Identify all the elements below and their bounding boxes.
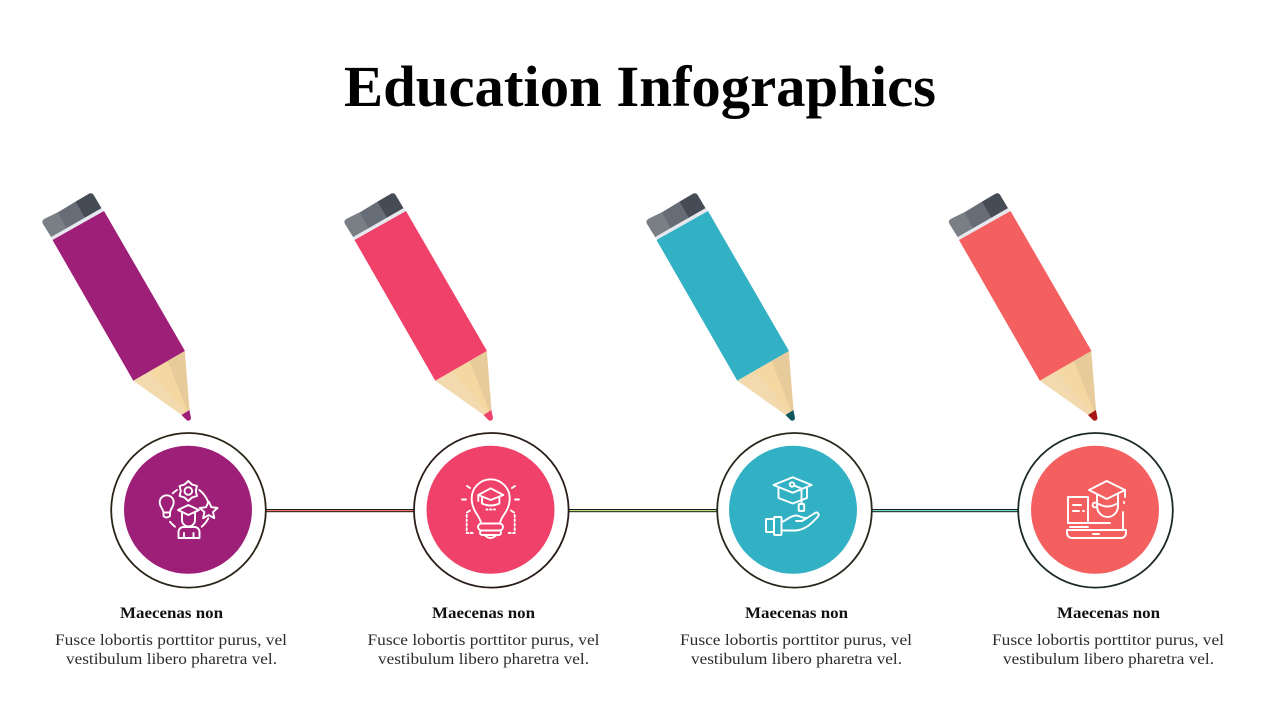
badge circle: [124, 446, 252, 574]
panel: step 1: [42, 193, 288, 668]
panel: step 3: [646, 193, 913, 668]
label: step 4 text: vestibulum libero pharetra vel.: [1003, 651, 1214, 668]
panel: step 4: [949, 193, 1225, 668]
label: step 3 text: [680, 605, 913, 668]
label: step 4 text: [992, 605, 1225, 668]
label: step 1 text: [55, 605, 288, 668]
panel: step 2: [344, 193, 600, 668]
label: step 4 text: Fusce lobortis porttitor purus, vel: [992, 632, 1225, 649]
pencil: coral: [949, 193, 1098, 421]
label: step 3 text: Fusce lobortis porttitor purus, vel: [680, 632, 913, 649]
label: step 2 text: vestibulum libero pharetra vel.: [378, 651, 589, 668]
pencil: purple: [42, 193, 191, 421]
label: step 2 text: [368, 605, 600, 668]
badge circle: [426, 446, 554, 574]
label: step 3 text: vestibulum libero pharetra vel.: [691, 651, 902, 668]
label: step 2 text: Fusce lobortis porttitor purus, vel: [368, 632, 600, 649]
label: step 2 text: Maecenas non: [432, 605, 535, 622]
label: step 4 text: Maecenas non: [1057, 605, 1160, 622]
pencil: teal: [646, 193, 795, 421]
icon: student with gear, bulb and star: [160, 481, 218, 538]
badge circle: [1031, 446, 1159, 574]
icon: light bulb with graduation cap: [462, 479, 519, 538]
outer ring: [414, 433, 569, 588]
icon: hand holding graduation cap: [766, 477, 819, 535]
label: step 1 text: vestibulum libero pharetra vel.: [66, 651, 277, 668]
icon: laptop, book and graduation cap: [1067, 481, 1126, 538]
label: step 1 text: Maecenas non: [120, 605, 223, 622]
outer ring: [111, 433, 266, 588]
label: step 3 text: Maecenas non: [745, 605, 848, 622]
outer ring: [717, 433, 872, 588]
pencil: pink: [344, 193, 493, 421]
title: Education Infographics: [344, 54, 936, 119]
label: step 1 text: Fusce lobortis porttitor purus, vel: [55, 632, 288, 649]
outer ring: [1018, 433, 1173, 588]
badge circle: [729, 446, 857, 574]
connector lines: [264, 509, 1020, 512]
